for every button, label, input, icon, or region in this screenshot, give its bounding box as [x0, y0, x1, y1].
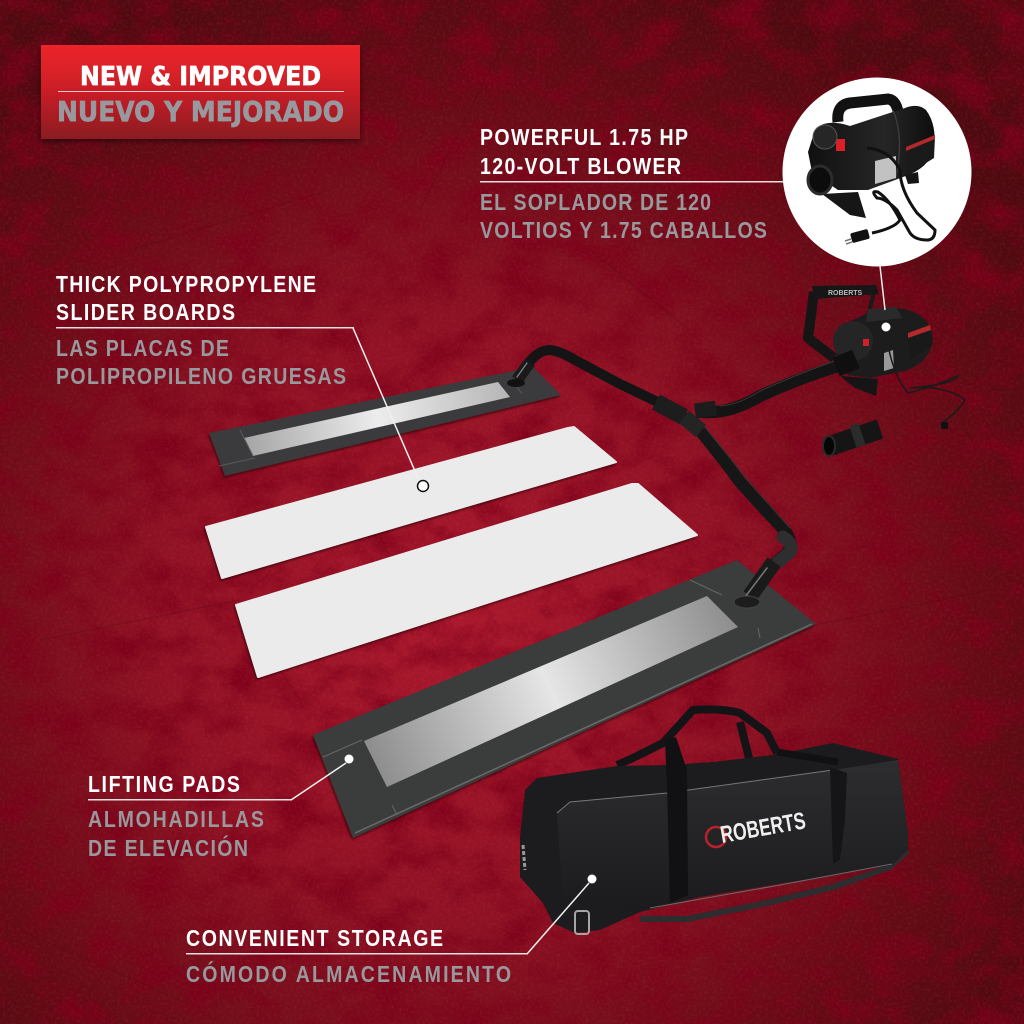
bag body	[520, 743, 908, 933]
callout: lifting pads: LIFTING PADS	[88, 772, 240, 797]
callout: convenient storage: CONVENIENT STORAGE	[186, 926, 443, 951]
badge: new and improved: NUEVO Y MEJORADO	[57, 95, 344, 128]
bag front panel	[557, 760, 908, 910]
callout line and marker: slider boards	[353, 328, 428, 492]
callout: blower: VOLTIOS Y 1.75 CABALLOS	[480, 218, 767, 243]
callout: slider boards text: THICK POLYPROPYLENE	[56, 272, 316, 297]
blower body	[835, 308, 933, 378]
callout circle: blower photo	[782, 78, 972, 332]
blower photo cord	[867, 148, 935, 240]
badge: new and improved: NEW & IMPROVED	[80, 62, 321, 92]
callout: convenient storage: CÓMODO ALMACENAMIENTO	[186, 960, 511, 987]
stand	[840, 376, 878, 396]
spare hose adapter	[823, 429, 880, 456]
vertical webbing	[665, 737, 688, 903]
storage bag	[520, 709, 908, 934]
top lifting pad	[209, 367, 561, 476]
slider board 2	[236, 484, 697, 677]
outlet nozzle	[836, 359, 856, 367]
strap buckle	[575, 911, 589, 934]
callout: lifting pads	[88, 754, 354, 861]
carry handles	[617, 709, 777, 765]
shoulder strap	[640, 850, 908, 919]
callout: slider boards text: POLIPROPILENO GRUESAS	[56, 364, 346, 389]
callout: lifting pads: DE ELEVACIÓN	[88, 834, 248, 861]
callout: convenient storage	[186, 874, 596, 987]
blower photo body	[808, 106, 935, 190]
bottom lifting pad	[313, 560, 816, 838]
callout: blower: POWERFUL 1.75 HP	[480, 125, 688, 150]
callout: slider boards text: LAS PLACAS DE	[56, 336, 229, 361]
roberts logo	[706, 827, 726, 847]
callout: slider boards text: SLIDER BOARDS	[56, 300, 235, 325]
carrying strap	[808, 292, 834, 358]
callout: lifting pads: ALMOHADILLAS	[88, 807, 264, 832]
callout: blower: EL SOPLADOR DE 120	[480, 190, 711, 215]
hose system	[507, 350, 838, 608]
small blower assembly: ROBERTS	[828, 290, 863, 297]
callout: slider boards text	[56, 272, 354, 389]
small blower assembly	[808, 285, 965, 429]
blower photo handle	[838, 99, 899, 122]
storage bag: ROBERTS	[718, 807, 808, 849]
callout: blower: 120-VOLT BLOWER	[480, 154, 681, 179]
slider board 1	[206, 427, 616, 578]
badge: new and improved	[41, 45, 360, 139]
power cord	[889, 350, 965, 422]
blower photo nozzle and stand	[822, 192, 866, 218]
callout: blower	[480, 125, 785, 243]
